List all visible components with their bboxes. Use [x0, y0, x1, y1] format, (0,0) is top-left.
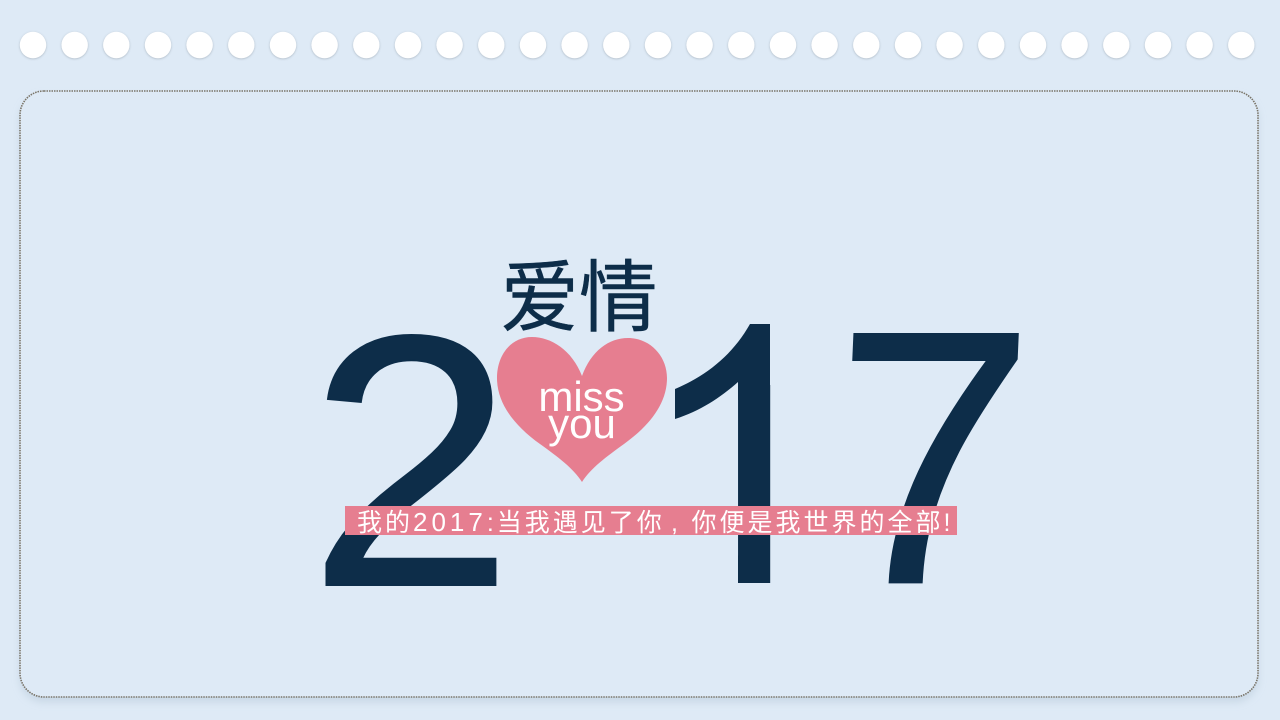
title: 爱情	[500, 254, 658, 342]
slogan banner	[345, 506, 957, 537]
big year digit 7: 7	[821, 255, 1040, 660]
banner text: ,	[671, 509, 681, 537]
big year digit 1	[675, 324, 770, 583]
banner background	[345, 506, 957, 535]
big year digit 2: 2	[308, 261, 514, 662]
digit 1 stem: 1	[646, 250, 850, 661]
heart shape	[497, 337, 667, 482]
binding holes row	[20, 32, 1255, 58]
heart badge	[497, 337, 667, 482]
banner text: 我的2017:当我遇见了你	[357, 507, 665, 537]
banner text: 你便是我世界的全部!	[692, 509, 953, 537]
heart text: you: you	[548, 400, 616, 447]
heart text: miss: miss	[538, 373, 625, 420]
digit 1 flag	[675, 324, 770, 419]
